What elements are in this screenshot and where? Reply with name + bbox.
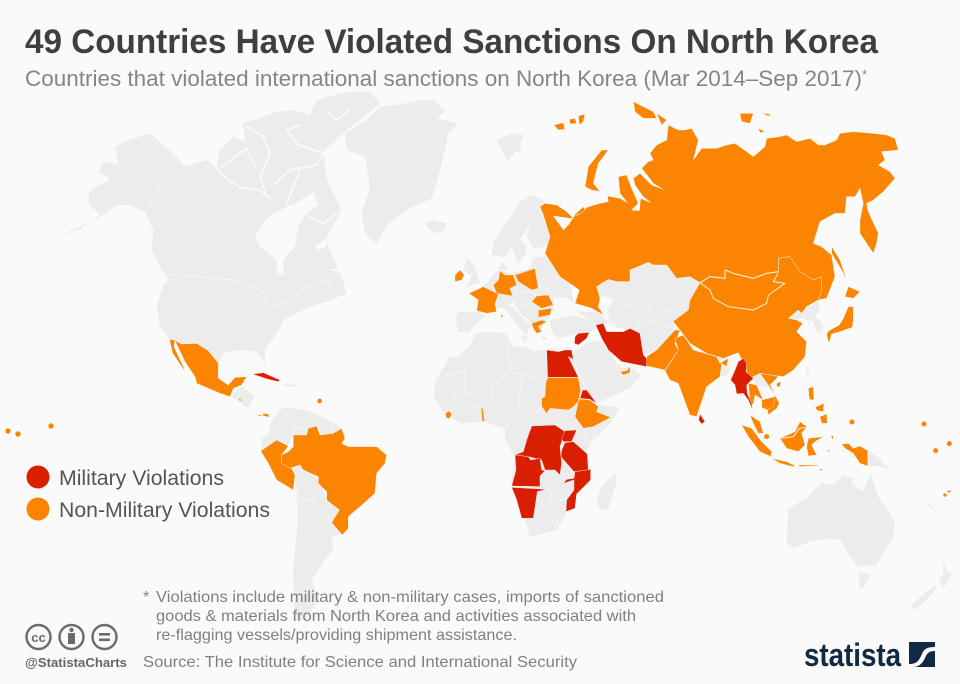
footnote: * bbox=[143, 589, 149, 606]
Sierra Leone bbox=[445, 411, 452, 419]
DR Congo bbox=[515, 425, 565, 475]
Bulgaria bbox=[538, 308, 552, 317]
Angola bbox=[512, 455, 545, 487]
Lake Victoria bbox=[560, 442, 565, 451]
footnote: re-flagging vessels/providing shipment assistance. bbox=[156, 627, 517, 644]
Greece bbox=[532, 320, 547, 333]
icon: creative commons licence bbox=[26, 625, 116, 649]
Peru bbox=[261, 440, 295, 490]
Sulawesi bbox=[807, 437, 823, 456]
Iran bbox=[596, 323, 650, 367]
Central Asia land bbox=[597, 262, 700, 355]
India bbox=[665, 335, 728, 417]
source: Source: The Institute for Science and International Security bbox=[143, 654, 577, 671]
Philippines bbox=[808, 387, 814, 400]
Korean peninsula, Taiwan, Papua New Guinea, Bangladesh, Nepal bbox=[693, 300, 892, 470]
Java bbox=[772, 458, 795, 467]
Russian Arctic islands bbox=[554, 102, 771, 216]
Middle East and South Asia violators bbox=[445, 323, 728, 518]
Iceland and Svalbard bbox=[425, 133, 523, 233]
world map bbox=[5, 92, 953, 620]
statista logo: statista bbox=[804, 637, 901, 673]
Europe land bbox=[456, 195, 610, 343]
subtitle: Countries that violated international sanctions on North Korea (Mar 2014–Sep 2017) bbox=[25, 66, 862, 91]
Thailand bbox=[748, 383, 763, 407]
Malaysia peninsula bbox=[750, 415, 763, 433]
footnote bbox=[143, 589, 664, 644]
El Salvador bbox=[237, 398, 243, 401]
Sumatra bbox=[742, 425, 772, 457]
subtitle: * bbox=[862, 67, 867, 82]
New Guinea (Indonesia) bbox=[842, 443, 868, 466]
Myanmar bbox=[731, 358, 753, 410]
icon: creative commons licence: cc bbox=[31, 630, 46, 645]
Egypt bbox=[547, 350, 578, 377]
Uganda bbox=[562, 430, 577, 442]
Costa Rica and Panama bbox=[248, 407, 269, 417]
Vietnam bbox=[760, 373, 779, 415]
Australia and New Zealand land bbox=[787, 473, 953, 610]
Cambodia bbox=[762, 397, 775, 410]
Romania bbox=[532, 295, 553, 308]
statista charts handle: @StatistaCharts bbox=[25, 655, 127, 670]
Southeast Asia violators bbox=[731, 358, 952, 471]
Lesotho outline bbox=[552, 520, 558, 526]
Syria bbox=[574, 332, 589, 345]
Ethiopia bbox=[575, 399, 611, 428]
Ireland bbox=[455, 270, 464, 282]
Barbados dot bbox=[317, 399, 322, 403]
Pakistan bbox=[647, 330, 680, 370]
Europe violators bbox=[455, 268, 553, 339]
UAE bbox=[620, 367, 630, 375]
Brazil bbox=[282, 426, 387, 535]
Mexico bbox=[175, 341, 247, 397]
Pacific dots left bbox=[5, 423, 54, 437]
Tanzania bbox=[561, 442, 588, 472]
Russia bbox=[540, 102, 898, 315]
title: 49 Countries Have Violated Sanctions On North Korea bbox=[25, 23, 879, 61]
Eritrea bbox=[580, 390, 597, 403]
Central and South America land bbox=[231, 383, 347, 620]
North America land bbox=[60, 92, 458, 365]
legend bbox=[26, 466, 270, 522]
Sudan bbox=[542, 378, 581, 413]
Borneo bbox=[780, 422, 807, 452]
China and Mongolia bbox=[673, 257, 853, 387]
Namibia bbox=[512, 487, 547, 518]
Benin bbox=[481, 408, 485, 421]
Mexico, Central America and South America violators bbox=[169, 339, 387, 535]
legend item: military: Military Violations bbox=[59, 467, 224, 490]
footnote: Violations include military & non-military cases, imports of sanctioned bbox=[156, 589, 664, 606]
Greenland bbox=[345, 100, 458, 243]
Africa and Middle East land bbox=[433, 332, 642, 537]
Mozambique bbox=[563, 469, 591, 512]
Japan bbox=[827, 307, 853, 343]
Germany bbox=[493, 271, 517, 296]
France bbox=[469, 287, 498, 313]
Fiji bbox=[943, 493, 947, 497]
Sri Lanka bbox=[699, 414, 705, 424]
Poland bbox=[515, 268, 538, 290]
footnote: goods & materials from North Korea and activities associated with bbox=[156, 608, 636, 625]
Singapore and Pacific island dots bbox=[764, 434, 769, 439]
legend item: non-military: Non-Military Violations bbox=[59, 499, 270, 522]
Laos bbox=[752, 373, 775, 395]
Cuba bbox=[253, 373, 280, 382]
